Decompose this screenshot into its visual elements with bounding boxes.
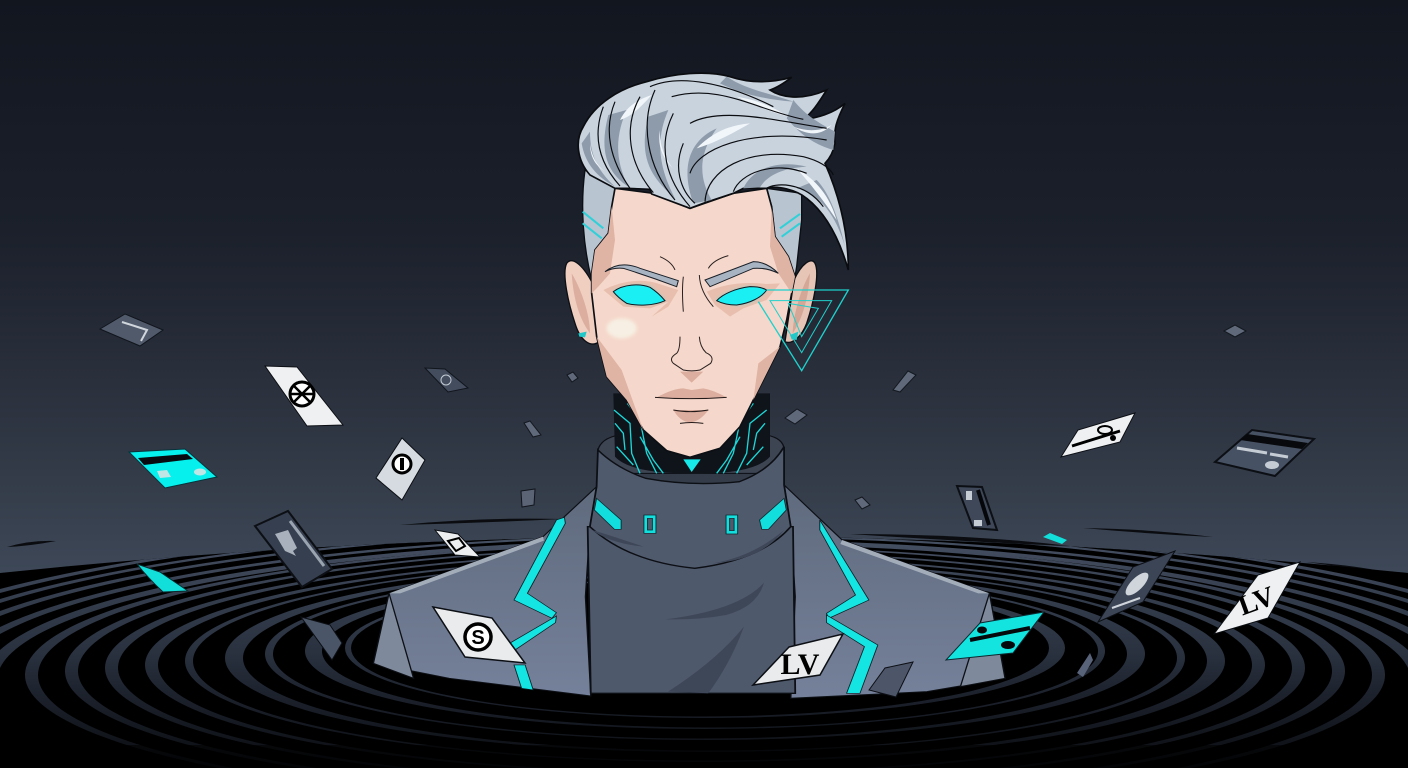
card: gray right credit — [1215, 430, 1314, 476]
earring right — [790, 332, 798, 340]
left ear — [565, 261, 599, 344]
earring left — [578, 332, 587, 337]
shaved side left — [583, 170, 615, 280]
card: dark vertical — [957, 486, 997, 530]
card: cyan front right — [946, 612, 1044, 660]
eye glow — [613, 285, 767, 305]
shard: sinking dark — [301, 617, 342, 660]
shard: by jacket — [869, 662, 913, 697]
right eye — [717, 287, 767, 305]
shaved side right — [767, 188, 802, 277]
left eye — [613, 285, 665, 305]
card: tiny chips — [524, 325, 1246, 509]
cyan lapel piping — [510, 517, 878, 693]
card: white LV on jacket — [753, 634, 843, 685]
holographic triangle overlay — [758, 290, 848, 371]
streaks above the pool — [7, 519, 1408, 584]
card: white LV right: LV — [1234, 581, 1279, 622]
hair highlights — [590, 95, 837, 220]
card: white LV on jacket: LV — [781, 648, 820, 681]
hair — [578, 73, 848, 270]
face — [592, 188, 795, 457]
collar front — [590, 447, 791, 568]
collar back — [598, 435, 784, 473]
jacket side folds — [373, 593, 1005, 687]
right ear — [785, 261, 817, 342]
card: small cyan — [1043, 533, 1067, 544]
figure: neck, head, hair — [565, 73, 848, 473]
card: white right — [1061, 413, 1135, 457]
nose and lip shading — [657, 372, 727, 422]
hair shading — [582, 77, 845, 247]
left eyebrow — [605, 265, 678, 287]
card: large dark — [255, 511, 332, 587]
eye socket shading — [603, 281, 780, 317]
collar cyan tabs — [594, 498, 786, 534]
cheek highlight — [607, 318, 637, 338]
black vortex pool with rings — [0, 538, 1408, 768]
torso fold shadows — [666, 583, 764, 693]
hair strand lines — [598, 81, 833, 207]
jacket left panel — [373, 487, 597, 696]
card: small gray — [425, 368, 468, 392]
jacket right panel — [784, 485, 1005, 698]
mouth line — [655, 397, 727, 423]
card: small gray chip — [521, 489, 535, 507]
card: pale emblem — [376, 438, 425, 500]
turtleneck torso — [588, 527, 795, 693]
brow and nose lines — [660, 256, 728, 371]
card: white with cross emblem — [265, 366, 343, 426]
neck with circuitry — [613, 393, 770, 473]
floating cards — [100, 314, 1314, 697]
card: white LV right — [1214, 562, 1300, 634]
card: white S on jacket: S — [471, 627, 485, 649]
card: white S on jacket — [433, 607, 525, 663]
card: cyan credit — [129, 449, 217, 488]
card: dark with logo — [1098, 551, 1175, 622]
shard: right small — [1077, 653, 1093, 677]
right eyebrow — [705, 262, 778, 287]
shoulder highlights — [389, 537, 989, 593]
card: gray top left — [100, 314, 163, 346]
card: cyan sliver — [137, 564, 188, 592]
card: small white — [435, 530, 480, 557]
figure: body — [373, 435, 1005, 698]
temple cyan marks — [583, 212, 800, 238]
face shading — [592, 207, 795, 430]
collar fold shadow — [592, 530, 784, 563]
